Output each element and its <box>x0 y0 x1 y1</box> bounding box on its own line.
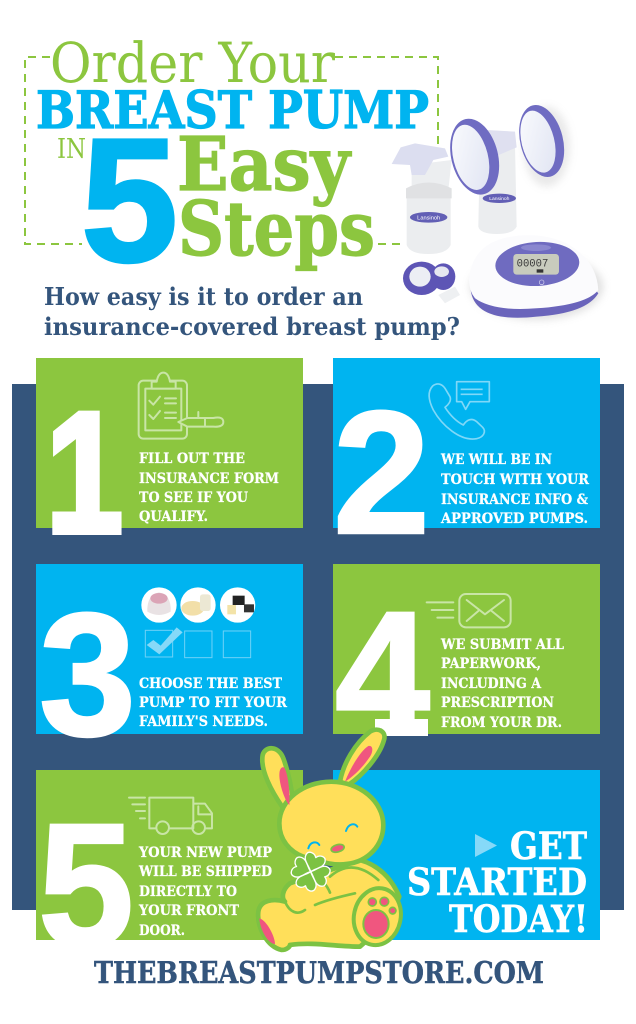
step 4 text: PAPERWORK, <box>441 655 541 672</box>
step 4 text <box>440 636 564 731</box>
step 1 text: FILL OUT THE <box>139 450 245 467</box>
step 2 text: WE WILL BE IN <box>440 451 552 468</box>
panel: step 1 <box>36 358 303 569</box>
front bottle <box>412 160 452 190</box>
product photo: breast pump: Lansinoh <box>417 215 440 221</box>
get started text: GET <box>510 824 587 868</box>
product photo: breast pump: Lansinoh <box>489 196 510 202</box>
icon: delivery truck <box>129 798 212 834</box>
step 5 text: DIRECTLY TO <box>139 883 237 900</box>
panel: step 4 <box>333 564 600 772</box>
title: Order Your <box>50 31 336 95</box>
flanges <box>443 113 507 200</box>
dashed title frame <box>25 57 438 244</box>
number 2: 2 <box>333 376 430 571</box>
product photo: breast pump <box>392 100 603 320</box>
panel: step 3 <box>36 564 303 773</box>
number 3: 3 <box>39 578 136 773</box>
step 4 text: WE SUBMIT ALL <box>440 636 564 653</box>
icon: phone and speech bubble <box>429 382 489 439</box>
get started text: STARTED <box>407 860 587 904</box>
title: Steps <box>178 185 375 273</box>
step 5 text: WILL BE SHIPPED <box>138 863 272 880</box>
valve <box>403 262 440 295</box>
step 1 text <box>139 450 279 525</box>
number 1: 1 <box>46 377 123 569</box>
pump motor unit <box>471 273 598 318</box>
step 3 text: FAMILY'S NEEDS. <box>139 713 268 730</box>
background band <box>12 384 624 910</box>
number 4: 4 <box>335 576 430 772</box>
number 5: 5 <box>38 788 134 984</box>
panel: step 2 <box>333 358 600 571</box>
title <box>36 31 429 299</box>
subtitle question <box>44 282 460 341</box>
step 5 text: YOUR FRONT <box>138 902 239 919</box>
step 5 text: DOOR. <box>139 922 185 939</box>
subtitle question: How easy is it to order an <box>44 282 363 311</box>
get started text <box>407 824 588 941</box>
step 2 text: APPROVED PUMPS. <box>440 510 588 527</box>
get started text: TODAY! <box>449 897 588 941</box>
icon: pump choices with checkboxes <box>141 587 255 658</box>
step 3 text <box>139 675 288 730</box>
step 2 text: INSURANCE INFO & <box>441 491 588 508</box>
step 2 text: TOUCH WITH YOUR <box>441 471 590 488</box>
step 4 text: FROM YOUR DR. <box>441 714 562 731</box>
subtitle question: insurance-covered breast pump? <box>44 312 460 341</box>
footer website url: THEBREASTPUMPSTORE.COM <box>94 955 544 990</box>
panel: step 5 <box>36 770 303 940</box>
title: 5 <box>81 103 178 299</box>
step 5 text: YOUR NEW PUMP <box>138 844 272 861</box>
step 4 text: INCLUDING A <box>441 675 542 692</box>
step 1 text: INSURANCE FORM <box>139 470 279 487</box>
step 2 text <box>440 451 590 527</box>
step 3 text: CHOOSE THE BEST <box>139 675 282 692</box>
title: IN <box>57 134 86 165</box>
rear bottle <box>478 143 517 234</box>
step 5 text <box>138 844 272 939</box>
icon: envelope <box>427 594 511 627</box>
step 4 text: PRESCRIPTION <box>441 694 554 711</box>
title: Easy <box>177 122 352 208</box>
title: BREAST PUMP <box>36 81 429 141</box>
step 1 text: TO SEE IF YOU <box>139 489 248 506</box>
step 3 text: PUMP TO FIT YOUR <box>139 694 288 711</box>
panel: call to action <box>333 770 600 941</box>
mascot: yellow bunny with clover <box>258 730 406 950</box>
icon: arrow <box>475 834 497 857</box>
step 1 text: QUALIFY. <box>139 508 208 525</box>
product photo: breast pump: 00007 <box>517 259 548 271</box>
icon: clipboard and pen <box>139 373 223 439</box>
